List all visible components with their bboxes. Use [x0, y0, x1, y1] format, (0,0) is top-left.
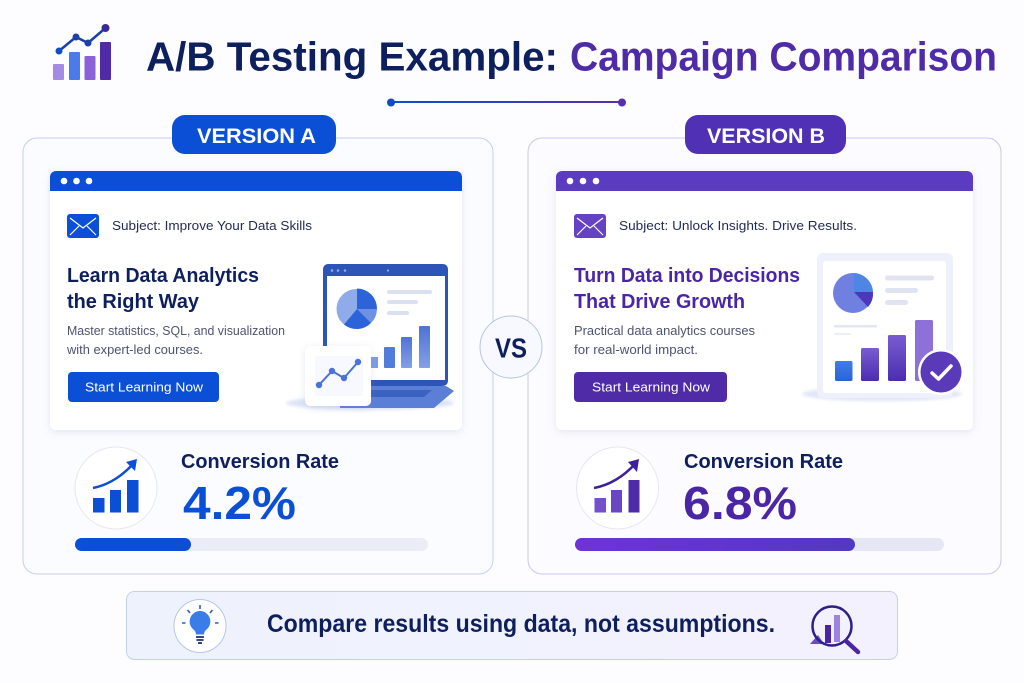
- headline B: Turn Data into Decisions: [574, 264, 800, 287]
- panel B frame: [528, 138, 1001, 574]
- browser bar A: [50, 171, 462, 191]
- title divider: [387, 98, 626, 106]
- pie chart B: [833, 273, 873, 313]
- headline A: Learn Data Analytics: [67, 264, 259, 287]
- icon: light bulb: [174, 600, 226, 652]
- subject line A: Subject: Improve Your Data Skills: [112, 218, 313, 233]
- takeaway text: Compare results using data, not assumptions.: [267, 610, 775, 638]
- metric A: [75, 447, 428, 551]
- title: [146, 34, 997, 80]
- button A: Start Learning Now: [85, 380, 204, 394]
- button B: Start Learning Now: [592, 380, 711, 394]
- label: conversion rate A: Conversion Rate: [181, 451, 339, 473]
- badge: version B: VERSION B: [707, 124, 825, 148]
- body text B: for real-world impact.: [574, 343, 698, 357]
- body text B: [574, 324, 755, 357]
- badge: version B: [685, 115, 846, 154]
- progress bar B: [575, 538, 944, 551]
- badge: version A: VERSION A: [197, 124, 316, 148]
- VS badge: VS: [495, 332, 527, 364]
- metric B: [575, 447, 944, 551]
- body text A: with expert-led courses.: [66, 343, 203, 357]
- button B: [574, 372, 727, 402]
- panel A frame: [23, 138, 493, 574]
- value: 4.2%: 4.2%: [183, 477, 296, 529]
- icon: envelope A: [67, 214, 99, 238]
- headline B: [574, 264, 800, 313]
- icon: check badge: [918, 349, 964, 395]
- takeaway strip: [126, 592, 898, 660]
- icon: envelope B: [574, 214, 606, 238]
- panel: version B: [528, 115, 1001, 574]
- progress bar A: [75, 538, 428, 551]
- headline A: the Right Way: [67, 290, 200, 313]
- button A: [68, 372, 219, 402]
- icon: growth chart A: [75, 447, 157, 529]
- VS badge: [480, 316, 542, 378]
- headline A: [67, 264, 259, 313]
- icon: growth chart B: [576, 447, 658, 529]
- subject line B: Subject: Unlock Insights. Drive Results.: [619, 218, 857, 233]
- body text B: Practical data analytics courses: [574, 324, 755, 338]
- illustration: laptop dashboard: [286, 264, 454, 410]
- pie chart: [336, 288, 377, 329]
- icon: chart logo: [53, 24, 111, 80]
- icon: magnifier chart: [810, 606, 858, 652]
- body text A: [66, 324, 285, 357]
- body text A: Master statistics, SQL, and visualization: [67, 324, 285, 338]
- email card B: [556, 171, 973, 430]
- value: 6.8%: 6.8%: [683, 477, 797, 529]
- illustration: report with check: [802, 253, 964, 401]
- label: conversion rate B: Conversion Rate: [684, 451, 843, 473]
- floating line chart card: [305, 346, 371, 406]
- badge: version A: [172, 115, 336, 154]
- browser bar B: [556, 171, 973, 191]
- title: A/B Testing Example:: [146, 34, 558, 80]
- headline B: That Drive Growth: [574, 290, 745, 313]
- panel: version A: [23, 115, 493, 574]
- email card A: [50, 171, 462, 430]
- title: Campaign Comparison: [570, 34, 997, 80]
